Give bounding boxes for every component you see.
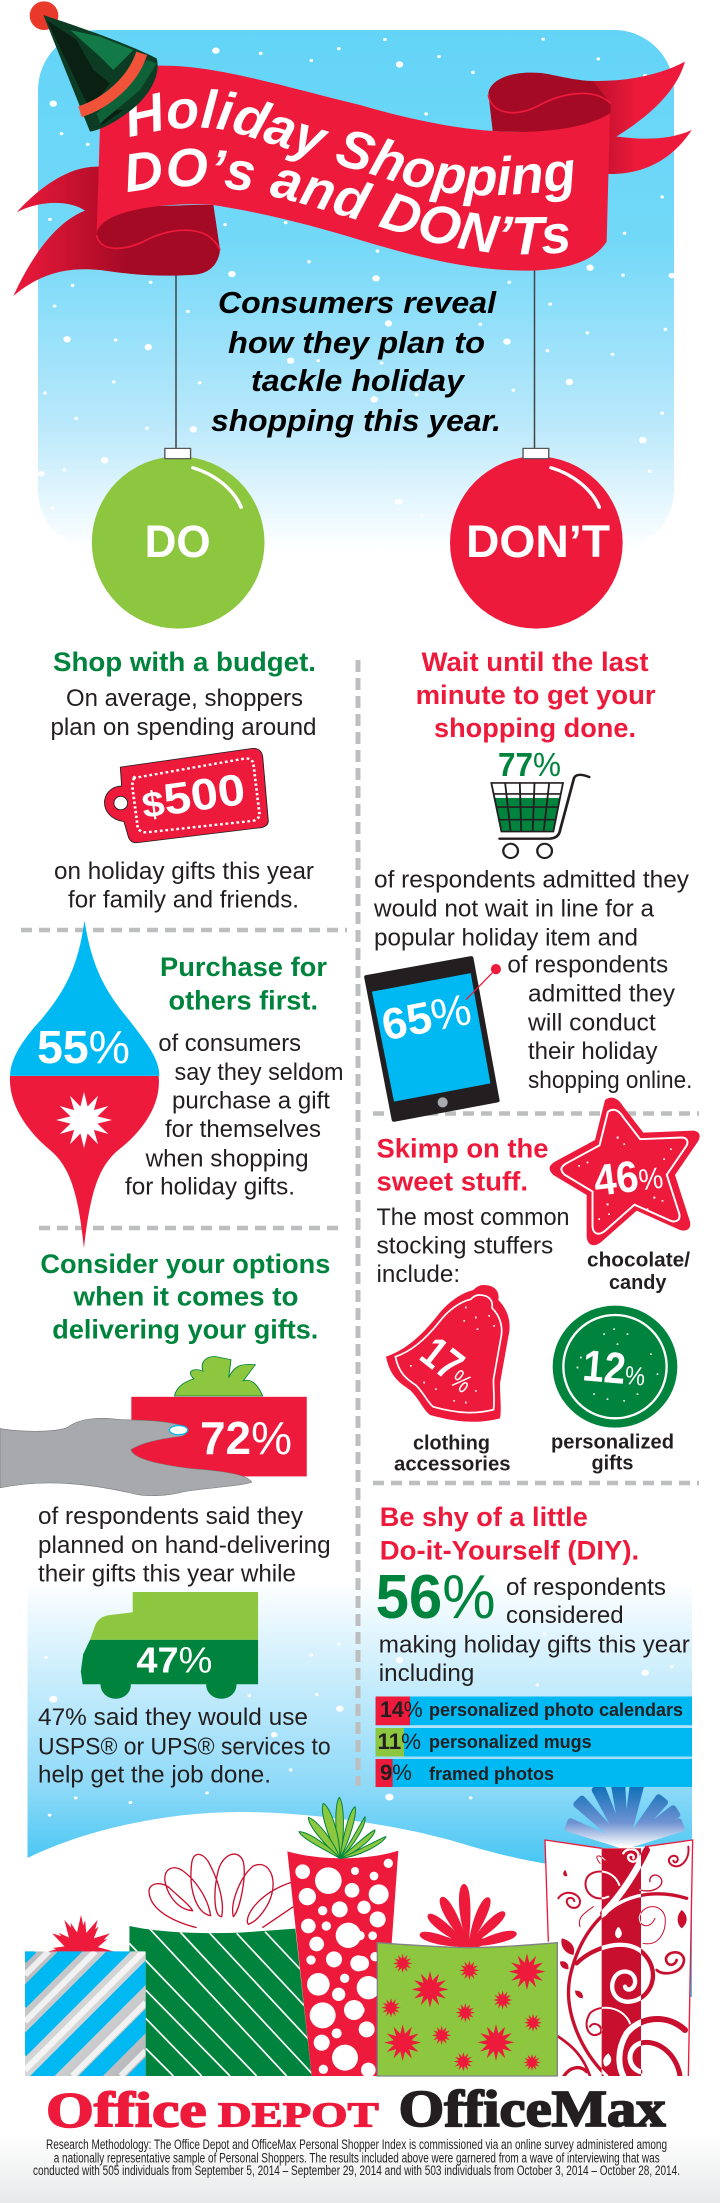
- heading: consider your options: delivering your gifts.: [52, 1315, 318, 1345]
- subtitle: Consumers reveal: [218, 285, 497, 320]
- heading: purchase for others first: others first.: [168, 986, 318, 1016]
- panel: do-it-yourself: [376, 1502, 692, 1787]
- icon: shopping cart: [487, 775, 589, 858]
- heading: wait until the last minute: Wait until the last: [422, 647, 649, 677]
- heading: wait until the last minute: [416, 647, 656, 743]
- panel: footer sky background: [28, 1580, 692, 1997]
- text: USPS or UPS: help get the job done.: [38, 1762, 271, 1789]
- heading: be shy of DIY: [380, 1502, 639, 1566]
- label: chocolate candy: [587, 1250, 690, 1294]
- text: holiday gifts: on holiday gifts this year: [54, 858, 314, 885]
- text: shop online: of respondents: [507, 952, 668, 979]
- icon: hand holding gift 72%: [0, 1357, 307, 1496]
- text: USPS or UPS: 47% said they would use: [38, 1704, 308, 1731]
- label: personalized gifts: personalized: [551, 1432, 674, 1454]
- panel: purchase for others first: [10, 921, 343, 1248]
- bar: personalized mugs 11%: [376, 1728, 692, 1756]
- subtitle: how they plan to: [228, 325, 485, 360]
- gift: blue silver striped: [25, 1915, 146, 2076]
- heading: shop with a budget: Shop with a budget.: [53, 647, 316, 677]
- text: wait in line: popular holiday item and: [374, 924, 638, 951]
- panel: consider your options: [0, 1249, 331, 1789]
- heading: be shy of DIY: Be shy of a little: [380, 1502, 588, 1532]
- heading: be shy of DIY: Do-it-Yourself (DIY).: [380, 1536, 639, 1566]
- icon: bell cookie 17%: [386, 1285, 510, 1422]
- text: shop online: admitted they: [528, 981, 675, 1008]
- text: research methodology: [33, 2137, 680, 2178]
- bar: personalized mugs 11%: personalized mugs: [429, 1732, 592, 1752]
- text: average spend: plan on spending around: [50, 714, 316, 741]
- panel: header sky background: [38, 30, 675, 550]
- heading: skimp on the sweet stuff: [376, 1134, 548, 1197]
- text: consumers seldom: of consumers: [158, 1030, 301, 1057]
- panel: shop with a budget: [50, 647, 316, 914]
- text: consumers seldom: for holiday gifts.: [125, 1174, 295, 1200]
- text: shop online: [507, 952, 692, 1094]
- panel: wait until the last minute: [366, 647, 692, 1120]
- icon: star cookie 46%: [550, 1098, 700, 1245]
- logo: Office Depot: DEPOT: [218, 2096, 379, 2135]
- label: personalized gifts: gifts: [592, 1452, 634, 1474]
- ribbon fold highlights: [97, 93, 611, 250]
- text: wait in line: would not wait in line for a: [373, 896, 655, 922]
- ribbon main band: [97, 66, 610, 271]
- gift: swirl pattern with blue bow: [545, 1786, 693, 2076]
- ribbon right roll: [488, 73, 611, 132]
- text: stocking stuffers: stocking stuffers: [376, 1233, 553, 1260]
- icon: delivery truck 47%: 47%: [136, 1640, 212, 1681]
- text: consumers seldom: for themselves: [165, 1116, 321, 1143]
- text: consumers seldom: when shopping: [145, 1146, 309, 1172]
- label: clothing accessories: clothing: [413, 1433, 490, 1455]
- icon: tablet 65%: 65%: [378, 985, 475, 1050]
- icon: delivery truck 47%: [81, 1592, 258, 1699]
- heading: consider your options: [40, 1249, 330, 1345]
- text: holiday gifts: [54, 858, 314, 914]
- text: shop online: shopping online.: [528, 1067, 692, 1094]
- label: personalized gifts: [551, 1432, 674, 1474]
- ribbon right tail lower: [600, 130, 692, 174]
- subtitle: [211, 285, 501, 438]
- text: wait in line: [373, 867, 689, 951]
- gift: red polka dot with green bow: [287, 1797, 398, 2077]
- text: stocking stuffers: The most common: [376, 1204, 570, 1231]
- icon: round cookie 12%: 12%: [581, 1341, 648, 1396]
- icon: star cookie 46%: 46%: [591, 1149, 665, 1206]
- label: clothing accessories: accessories: [394, 1454, 511, 1476]
- text: making gifts: of respondents: [506, 1574, 666, 1601]
- text: stocking stuffers: include:: [376, 1261, 460, 1288]
- text: making gifts: [379, 1574, 690, 1687]
- bar: framed photos 9%: 9%: [380, 1760, 412, 1785]
- ornament: DON'T: [450, 448, 623, 629]
- text: holiday gifts: for family and friends.: [68, 886, 299, 914]
- text: wait in line: of respondents admitted they: [374, 867, 689, 894]
- text: average spend: [50, 685, 316, 741]
- heading: purchase for others first: [160, 952, 327, 1016]
- text: hand delivering: [38, 1503, 331, 1588]
- icon: tablet 65%: [366, 958, 501, 1120]
- text: making gifts: considered: [506, 1602, 624, 1629]
- ornament: DO: [92, 448, 264, 629]
- ribbon left roll: [97, 205, 220, 250]
- subtitle: shopping this year.: [211, 403, 501, 438]
- bar: framed photos 9%: [376, 1759, 692, 1787]
- text: making gifts: including: [379, 1660, 474, 1687]
- heading: wait until the last minute: shopping done.: [434, 713, 636, 743]
- ribbon banner: [13, 62, 692, 296]
- icon: price tag $500: $500: [138, 765, 248, 828]
- stat: 56%: 56%: [376, 1563, 496, 1632]
- text: hand delivering: planned on hand-delivering: [38, 1532, 331, 1559]
- footer shading: [0, 2135, 720, 2203]
- heading: consider your options: Consider your options: [40, 1249, 330, 1279]
- label: clothing accessories: [394, 1433, 511, 1476]
- text: USPS or UPS: [38, 1704, 331, 1789]
- ornament strings: [176, 270, 534, 449]
- icon: elf hat: [30, 1, 158, 132]
- logo: OfficeMax: OfficeMax: [399, 2081, 666, 2138]
- logo: Office Depot: [46, 2082, 379, 2138]
- label: chocolate candy: chocolate/: [587, 1250, 690, 1272]
- bar: personalized mugs 11%: 11%: [378, 1729, 421, 1754]
- text: USPS or UPS: USPS® or UPS® services to: [38, 1734, 331, 1761]
- title: Holiday Shopping: [129, 89, 574, 206]
- gift: green with red stars and bow: [377, 1884, 557, 2076]
- stat: 77%: 77%: [498, 746, 561, 783]
- heading: wait until the last minute: minute to get your: [416, 680, 656, 710]
- heading: skimp on the sweet stuff: Skimp on the: [376, 1134, 548, 1164]
- text: hand delivering: their gifts this year while: [38, 1561, 296, 1588]
- text: consumers seldom: say they seldom: [174, 1059, 344, 1086]
- bar: personalized photo calendars 14%: personalized photo calendars: [429, 1700, 683, 1720]
- heading: skimp on the sweet stuff: sweet stuff.: [376, 1167, 528, 1197]
- icon: price tag $500: [105, 748, 268, 843]
- title: [128, 89, 574, 254]
- heading: purchase for others first: Purchase for: [160, 952, 327, 982]
- icon: round cookie 12%: [553, 1306, 677, 1428]
- text: stocking stuffers: [376, 1204, 570, 1288]
- text: making gifts: making holiday gifts this year: [379, 1632, 690, 1658]
- text: shop online: their holiday: [528, 1038, 658, 1065]
- icon: teardrop ornament 55%: 55%: [37, 1021, 130, 1073]
- ornament: DON'T: DON’T: [466, 516, 610, 567]
- text: consumers seldom: [125, 1030, 344, 1200]
- bar: personalized photo calendars 14%: [376, 1696, 692, 1725]
- icon: bell cookie 17%: 17%: [411, 1327, 487, 1402]
- ribbon left tail: [13, 167, 220, 296]
- panel: skimp on the sweet stuff: [376, 1098, 700, 1476]
- icon: hand holding gift 72%: 72%: [200, 1412, 292, 1464]
- ribbon right tail upper: [567, 62, 685, 140]
- text: average spend: On average, shoppers: [66, 685, 303, 712]
- title: DO’s and DON’Ts: [128, 148, 568, 254]
- subtitle: tackle holiday: [251, 363, 466, 398]
- icon: teardrop ornament 55%: [10, 921, 159, 1248]
- gift: green striped with red loop bow: [127, 1854, 313, 2077]
- bar: personalized photo calendars 14%: 14%: [380, 1697, 423, 1722]
- text: shop online: will conduct: [527, 1009, 656, 1036]
- label: chocolate candy: candy: [609, 1272, 667, 1294]
- logo: Office Depot: Office: [46, 2082, 207, 2138]
- ornament: DO: DO: [145, 516, 211, 567]
- heading: consider your options: when it comes to: [72, 1281, 298, 1311]
- text: consumers seldom: purchase a gift: [172, 1088, 330, 1115]
- bar: framed photos 9%: framed photos: [429, 1764, 554, 1784]
- text: hand delivering: of respondents said they: [38, 1503, 303, 1530]
